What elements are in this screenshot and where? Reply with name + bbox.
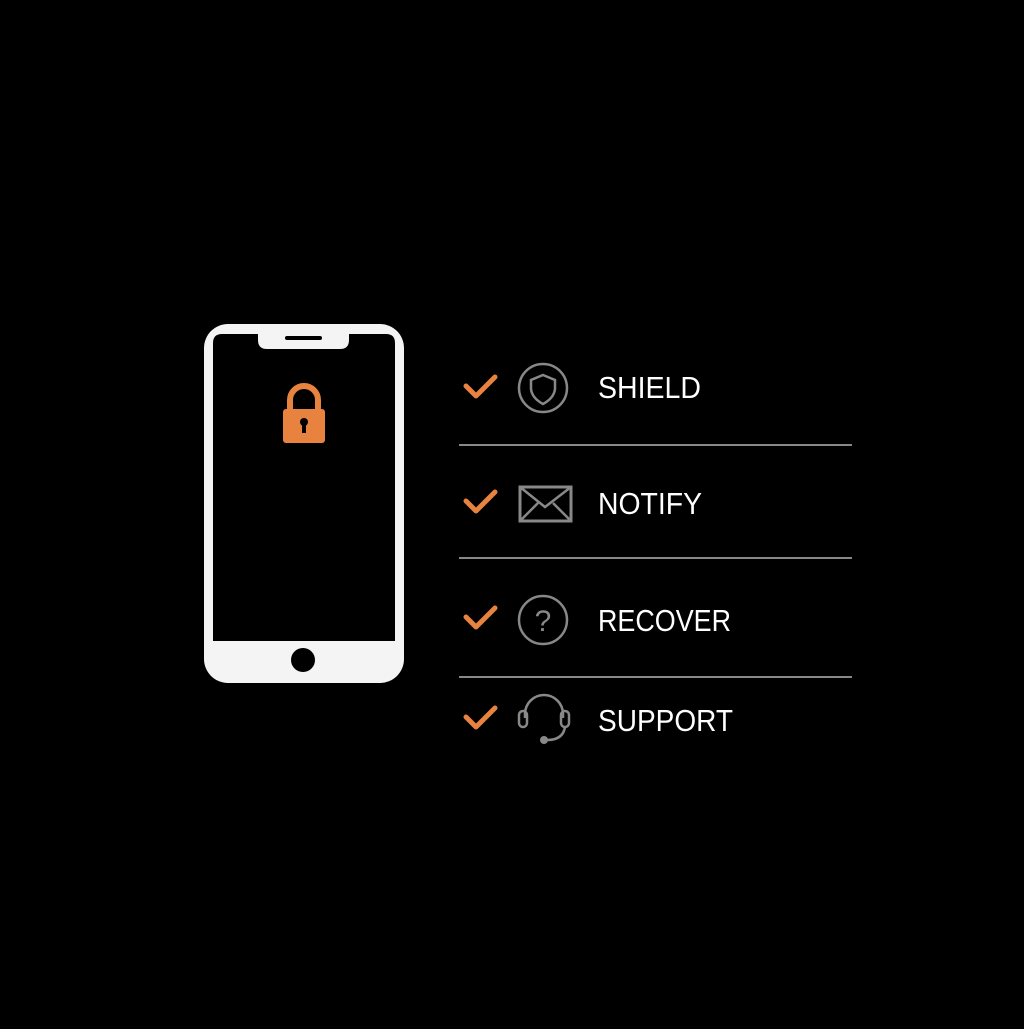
row: recover bbox=[466, 596, 731, 644]
row: shield bbox=[466, 364, 701, 412]
icon: lock bbox=[283, 386, 325, 443]
row: shield: SHIELD bbox=[598, 370, 701, 405]
row: recover: RECOVER bbox=[598, 603, 731, 638]
row: notify: NOTIFY bbox=[598, 486, 702, 521]
row: notify bbox=[466, 486, 702, 521]
row: support bbox=[466, 695, 733, 744]
phone bbox=[204, 324, 404, 683]
row: support: SUPPORT bbox=[598, 703, 733, 738]
row: recover: ? bbox=[535, 605, 551, 638]
